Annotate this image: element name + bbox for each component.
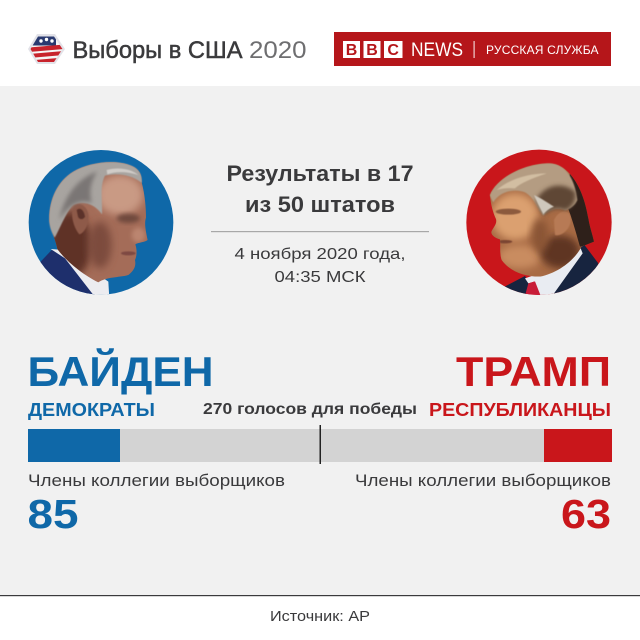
shirt (525, 247, 583, 297)
icon: US flag hexagon (28, 34, 66, 65)
date and time: 04:35 МСК (274, 269, 366, 286)
BBC blocks: B (346, 42, 357, 59)
270 marker (320, 425, 321, 464)
service name: РУССКАЯ СЛУЖБА (486, 43, 598, 57)
headline: Результаты в 17 (226, 161, 414, 186)
header title: Выборы в США (72, 37, 242, 64)
candidate name: Trump: ТРАМП (456, 348, 611, 395)
party: Democrats: ДЕМОКРАТЫ (28, 400, 155, 420)
shirt (51, 249, 109, 298)
electors label left: Члены коллегии выборщиков (28, 471, 285, 490)
hair (49, 162, 142, 238)
header year: 2020 (249, 37, 306, 64)
BBC blocks: C (387, 42, 399, 59)
portrait: Trump (466, 150, 612, 298)
dark back of head (568, 174, 594, 247)
hair (490, 163, 577, 216)
BBC News Russian logo (334, 32, 611, 66)
header band (0, 0, 640, 86)
portrait: Biden (29, 150, 173, 298)
ear (554, 211, 571, 235)
electors label right: Члены коллегии выборщиков (355, 471, 611, 490)
jacket (505, 276, 529, 294)
face and neck (490, 164, 594, 277)
bar: Trump 63 (544, 429, 612, 462)
source: Источник: AP (270, 608, 370, 625)
headline: из 50 штатов (245, 192, 395, 217)
candidate name: Biden: БАЙДЕН (28, 347, 214, 395)
jacket (40, 250, 95, 294)
electoral vote bar (28, 425, 612, 464)
headline (226, 161, 414, 217)
votes to win label: 270 голосов для победы (203, 401, 417, 418)
date and time: 4 ноября 2020 года, (234, 246, 406, 263)
Biden vote count: 85 (28, 491, 78, 537)
BBC blocks: B (366, 42, 378, 59)
bar: Biden 85 (28, 429, 120, 462)
date and time (234, 246, 406, 286)
party: Republicans: РЕСПУБЛИКАНЦЫ (429, 400, 611, 420)
tie (526, 281, 540, 295)
Trump vote count: 63 (561, 491, 611, 537)
neck and face (47, 158, 150, 285)
BBC blocks (343, 41, 402, 59)
NEWS wordmark: NEWS (411, 40, 463, 61)
ear (72, 204, 89, 234)
footer (0, 595, 640, 640)
